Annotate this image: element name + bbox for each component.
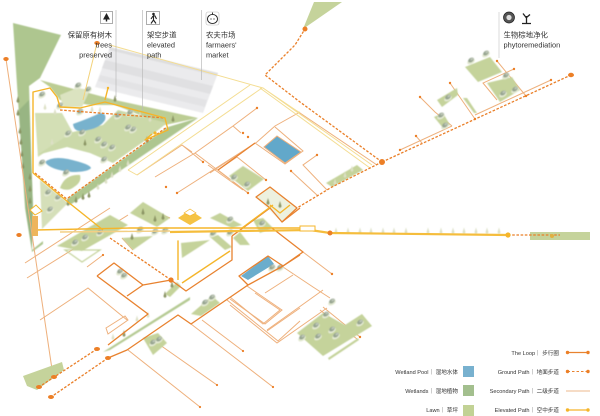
- park inner lawn: [60, 88, 90, 107]
- legend: The Loop｜ 步行圈: [511, 349, 559, 357]
- secondary path network: [6, 59, 551, 407]
- trees: centre and south: [70, 166, 501, 348]
- callout: elevated path: 架空步道: [147, 30, 177, 40]
- lawn patches: phytoremediation plots: [434, 49, 520, 131]
- legend: Lawn｜ 草坪: [426, 406, 458, 414]
- callout: farmers' market: farmaers': [206, 40, 237, 50]
- trees in park: [16, 81, 175, 215]
- legend: [395, 349, 590, 416]
- lawn: top wedge: [303, 2, 342, 29]
- wetland band: [67, 118, 198, 205]
- legend: Secondary Path｜ 二级步道: [490, 387, 559, 395]
- callout: farmers' market: [202, 10, 237, 80]
- callout: farmers' market: market: [206, 50, 229, 60]
- callout: trees preserved: preserved: [79, 50, 112, 60]
- callout: farmers' market: 农夫市场: [206, 30, 236, 40]
- pool: north pond: [73, 113, 105, 131]
- lawn: south-east block: [297, 313, 372, 360]
- icon: walking person: [146, 12, 160, 24]
- icon: sprout: [522, 14, 531, 24]
- yellow platform on west strip: [30, 205, 42, 215]
- the loop: [97, 143, 303, 358]
- legend: Wetland Pool｜ 湿地水体: [395, 368, 458, 376]
- wetland wedge and left strip: [13, 23, 61, 252]
- south lawn: [40, 180, 68, 229]
- park north lawn: [40, 80, 198, 125]
- lawn island: [60, 175, 80, 190]
- legend: Ground Path｜ 地面步道: [498, 368, 559, 376]
- pool: centre-south: [241, 256, 274, 280]
- lawn patches: centre: [57, 165, 363, 355]
- icon: tree: [100, 12, 112, 24]
- pale yellow service roads: [83, 43, 372, 175]
- ground paths: [35, 29, 571, 397]
- panel: central park: [13, 23, 198, 252]
- callout: elevated path: [142, 10, 177, 110]
- callout: elevated path: elevated: [147, 40, 175, 50]
- wetland pool: [264, 136, 301, 163]
- legend: Wetlands｜ 湿地植物: [405, 387, 458, 395]
- callout: trees preserved: trees: [96, 40, 112, 50]
- icon: apple: [206, 12, 219, 25]
- callout: trees preserved: 保留原有树木: [68, 30, 113, 40]
- west lawn: [35, 113, 73, 157]
- icon: phyto badge: [504, 12, 514, 23]
- elevated path: [30, 88, 508, 283]
- pool: south pond: [45, 158, 91, 172]
- lawn: east axis end: [530, 232, 590, 240]
- building: grey market hall: [95, 47, 218, 113]
- callout: elevated path: path: [147, 50, 161, 60]
- lawn: far south-west blob: [23, 362, 64, 390]
- callout: trees preserved: [68, 10, 116, 97]
- central lawn: [37, 110, 167, 163]
- darker lower west strip: [19, 100, 33, 250]
- callout: phytoremediation: phytoremediation: [504, 40, 560, 50]
- yellow diamond platform: [178, 210, 202, 225]
- callout: phytoremediation: [499, 12, 560, 58]
- legend: Elevated Path｜ 空中步道: [495, 406, 559, 414]
- callout: phytoremediation: 生物棕地净化: [504, 30, 548, 40]
